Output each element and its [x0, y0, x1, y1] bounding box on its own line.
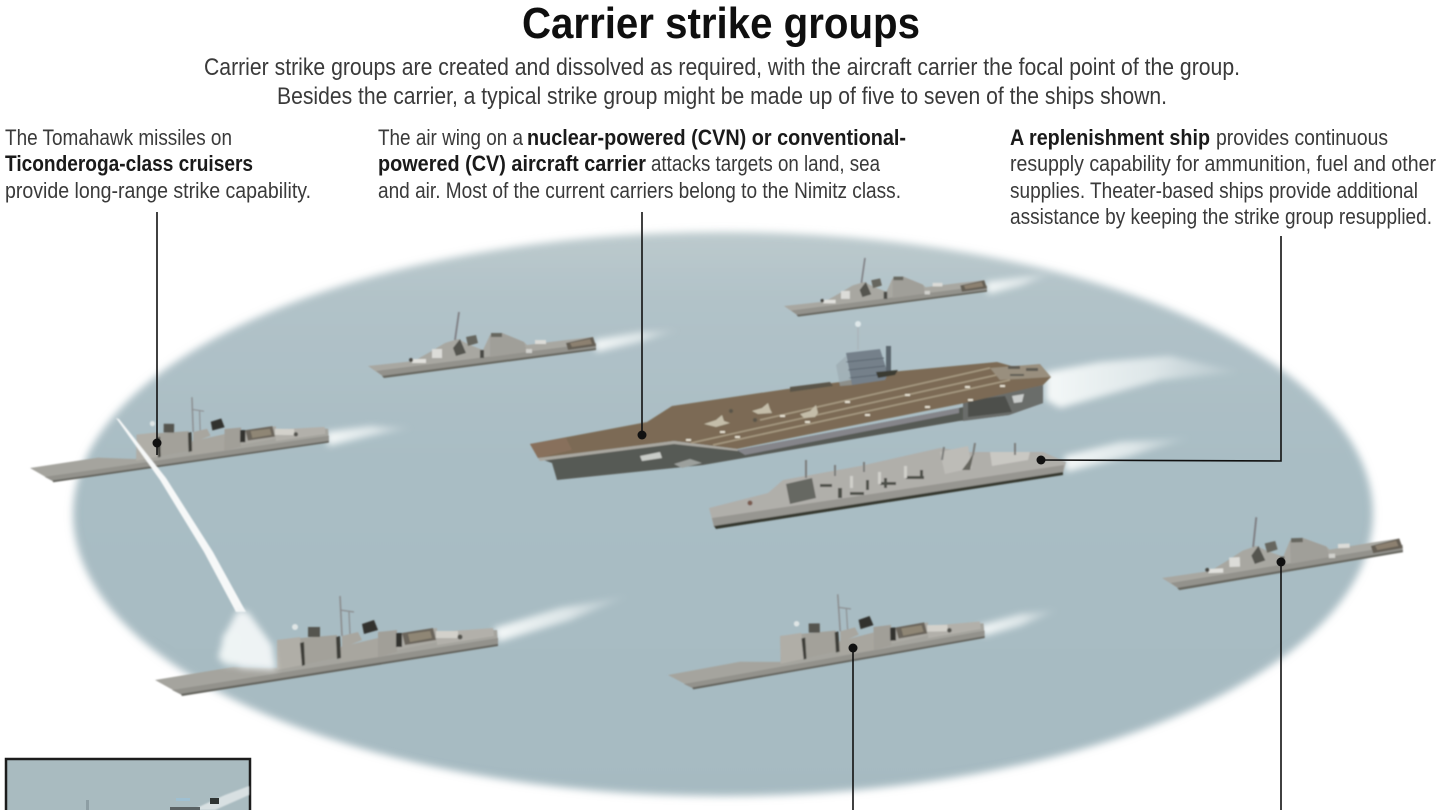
- text block: Ticonderoga-class cruisers: The Tomahawk missiles on: [5, 125, 232, 150]
- intro text: [204, 54, 1240, 110]
- ship: destroyer top right: [784, 258, 987, 317]
- ship: cruiser left: [30, 395, 329, 486]
- text block: aircraft carrier: [378, 125, 906, 203]
- intro text: Besides the carrier, a typical strike group might be made up of five to seven of the ships shown.: [277, 83, 1167, 110]
- wake: centre cruiser: [978, 610, 1058, 636]
- text block: replenishment ship: provides continuous: [1216, 125, 1388, 150]
- catapult lines: [691, 368, 1010, 445]
- ship: cruiser lower left: [155, 596, 498, 696]
- ship: destroyer upper left: [368, 312, 596, 378]
- leader line: centre cruiser: [848, 644, 858, 810]
- ship: aircraft carrier: [530, 321, 1051, 480]
- wake: lower left cruiser: [494, 596, 628, 642]
- ship: destroyer right: [1160, 512, 1404, 591]
- title: Carrier strike groups: [522, 0, 920, 48]
- intro text: Carrier strike groups are created and dissolved as required, with the aircraft carrier the focal point of the group.: [204, 54, 1240, 81]
- ship: replenishment ship: [709, 443, 1066, 529]
- text block: aircraft carrier: The air wing on a: [378, 125, 524, 150]
- carrier island: [846, 349, 888, 385]
- wake: replenishment ship: [1064, 438, 1190, 472]
- wake: left cruiser: [326, 426, 412, 446]
- leader line: right destroyer: [1276, 558, 1286, 810]
- ship: cruiser centre: [667, 592, 985, 690]
- missile launch smoke: [218, 610, 276, 670]
- missile trail: [116, 418, 246, 612]
- text block: aircraft carrier: nuclear-powered (CVN) or conventional-: [527, 125, 906, 150]
- carrier aircraft: [704, 403, 818, 427]
- carrier hull markings: [640, 452, 662, 461]
- ocean ellipse: [73, 232, 1373, 796]
- text block: Ticonderoga-class cruisers: provide long-range strike capability.: [5, 178, 311, 203]
- carrier hull: [538, 390, 1043, 480]
- text block: Ticonderoga-class cruisers: [5, 125, 311, 203]
- text block: Ticonderoga-class cruisers: Ticonderoga-class cruisers: [5, 151, 253, 176]
- wake: top right destroyer: [986, 272, 1056, 294]
- wake: carrier: [1046, 356, 1240, 408]
- wake: upper left destroyer: [594, 330, 678, 352]
- text block: replenishment ship: [1010, 125, 1436, 229]
- leader line: cruiser: [152, 212, 162, 455]
- leader line: replenishment ship: [1036, 236, 1281, 464]
- carrier deck: [530, 362, 1051, 458]
- inset photo: [6, 759, 250, 810]
- text block: aircraft carrier: powered (CV) aircraft carrier: [378, 151, 646, 176]
- text block: replenishment ship: A replenishment ship: [1010, 125, 1210, 150]
- text block: aircraft carrier: and air. Most of the current carriers belong to the Nimitz class.: [378, 178, 901, 203]
- text block: aircraft carrier: attacks targets on land, sea: [651, 151, 881, 176]
- leader line: carrier: [638, 212, 646, 440]
